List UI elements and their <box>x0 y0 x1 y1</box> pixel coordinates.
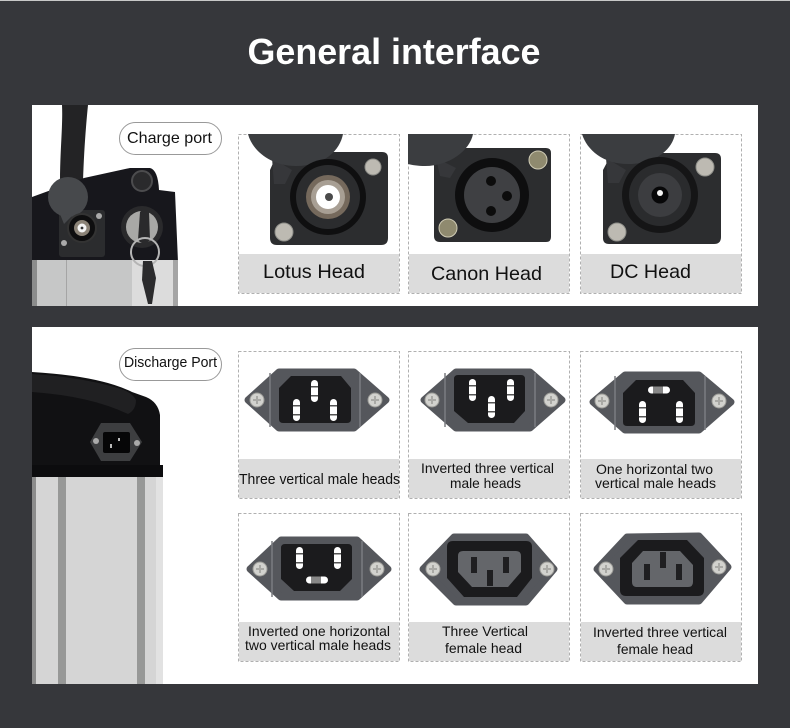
card: Three Vertical female head: female head <box>445 640 522 656</box>
card: Inverted three vertical male heads: Inverted three vertical <box>421 460 554 476</box>
title: General interface <box>248 31 540 72</box>
card: Lotus Head: Lotus Head <box>263 261 365 283</box>
card: Inverted three vertical female head <box>580 514 742 662</box>
card: Lotus Head <box>238 134 400 294</box>
card: Three Vertical female head: Three Vertical <box>442 623 528 639</box>
card: DC Head <box>580 134 742 294</box>
card: Three Vertical female head <box>408 514 570 662</box>
card: Three vertical male heads: Three vertical male heads <box>239 472 400 488</box>
battery photo: charge port <box>32 105 178 306</box>
card: Canon Head <box>408 134 570 294</box>
card: Inverted one horizontal two vertical male heads: Inverted one horizontal <box>248 623 390 639</box>
card: One horizontal two vertical male heads: vertical male heads <box>595 475 716 491</box>
card: One horizontal two vertical male heads: One horizontal two <box>596 461 713 477</box>
panel: charge port <box>32 105 758 306</box>
panel: discharge port <box>32 327 758 684</box>
label pill: Charge port <box>120 122 222 154</box>
card: Canon Head: Canon Head <box>431 263 542 285</box>
battery photo: discharge port <box>32 372 163 684</box>
card: Inverted three vertical male heads <box>408 352 570 498</box>
card: Inverted three vertical female head: Inverted three vertical <box>593 624 727 640</box>
label pill: Discharge Port: Discharge Port <box>124 355 217 371</box>
card: Inverted one horizontal two vertical male heads <box>238 514 400 662</box>
card: Three vertical male heads <box>238 352 400 498</box>
label pill: Discharge Port <box>120 348 222 380</box>
card: Inverted three vertical female head: female head <box>617 641 693 657</box>
card: Inverted one horizontal two vertical male heads: two vertical male heads <box>245 637 391 653</box>
card: Inverted three vertical male heads: male heads <box>450 475 521 491</box>
label pill: Charge port: Charge port <box>127 130 213 147</box>
card: One horizontal two vertical male heads <box>580 352 742 498</box>
card: DC Head: DC Head <box>610 261 691 283</box>
